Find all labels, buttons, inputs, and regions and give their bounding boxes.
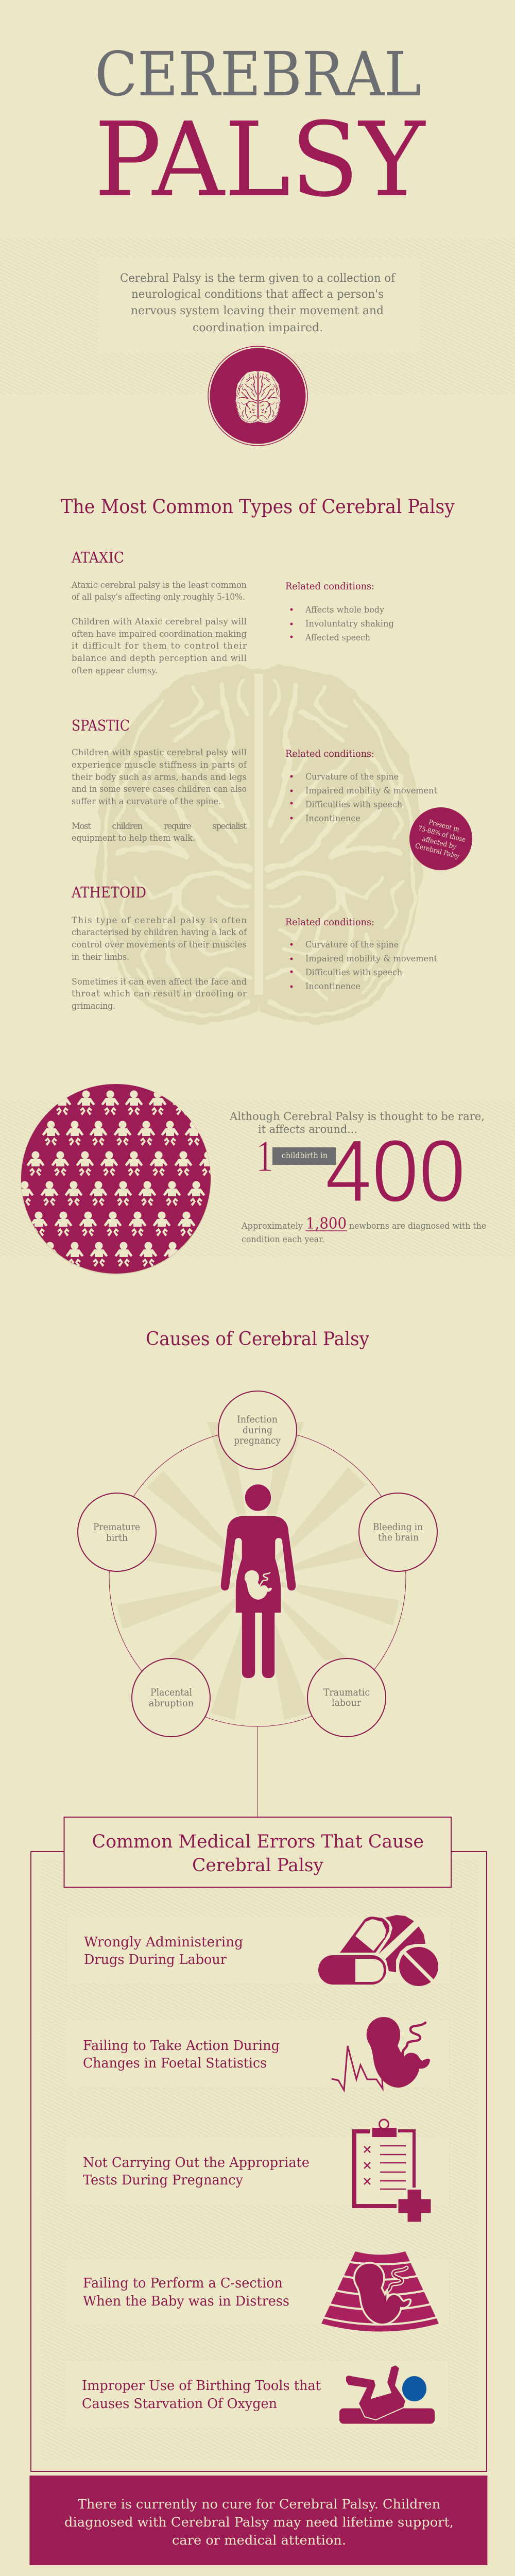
panel: ataxic: often appear clumsy. xyxy=(72,666,158,675)
icon: ultrasound xyxy=(320,2251,439,2332)
title: CEREBRAL xyxy=(95,39,421,110)
heading: medical errors xyxy=(64,1817,451,1887)
panel: spastic: suffer with a curvature of the spine. xyxy=(72,796,221,806)
cause: premature birth: birth xyxy=(106,1533,128,1544)
panel: athetoid: Curvature of the spine xyxy=(305,940,399,950)
error: appropriate tests: Tests During Pregnancy xyxy=(83,2173,243,2188)
cause: placental abruption: abruption xyxy=(149,1698,194,1709)
statistic: 1 in 400: childbirth in xyxy=(282,1151,328,1160)
cause: traumatic labour: Traumatic xyxy=(323,1687,370,1698)
heading: medical errors: Cerebral Palsy xyxy=(192,1855,323,1876)
baby circle xyxy=(15,1084,217,1275)
statistic: 1 in 400: it affects around... xyxy=(258,1123,357,1136)
heading: medical errors: Common Medical Errors That Cause xyxy=(92,1832,424,1852)
cause: bleeding: the brain xyxy=(378,1532,419,1543)
panel: ataxic: Involuntatry shaking xyxy=(305,619,394,629)
heading: causes: Causes of Cerebral Palsy xyxy=(146,1329,370,1350)
cause: premature birth xyxy=(78,1493,156,1571)
banner: no cure: diagnosed with Cerebral Palsy may need lifetime support, xyxy=(64,2515,454,2530)
banner: no cure: There is currently no cure for Cerebral Palsy. Children xyxy=(78,2497,440,2512)
panel: athetoid: Impaired mobility & movement xyxy=(305,954,437,963)
cause: infection: Infection xyxy=(237,1414,278,1425)
panel: athetoid: in their limbs. xyxy=(72,952,129,962)
statistic: 1 in 400: Although Cerebral Palsy is thought to be rare, xyxy=(229,1110,485,1123)
error: wrongly administering drugs xyxy=(67,1915,451,1987)
error: foetal statistics: Failing to Take Action During xyxy=(83,2038,280,2054)
panel: spastic: experience muscle stiffness in parts of xyxy=(72,760,248,770)
panel: ataxic: of all palsy's affecting only roughly 5-10%. xyxy=(72,592,245,602)
error: c-section: When the Baby was in Distress xyxy=(83,2294,289,2309)
panel: ataxic: Related conditions: xyxy=(285,581,374,592)
panel: spastic: SPASTIC xyxy=(72,717,130,734)
panel: spastic: their body such as arms, hands and legs xyxy=(72,772,247,782)
panel: ataxic: often have impaired coordination making xyxy=(72,629,247,639)
icon: clipboard xyxy=(354,2120,431,2222)
cause: bleeding xyxy=(359,1493,437,1571)
panel: ataxic: ATAXIC xyxy=(71,549,124,566)
panel: ataxic xyxy=(71,549,394,675)
panel: ataxic: Children with Ataxic cerebral palsy will xyxy=(72,617,247,626)
badge: 75-88%: 75-88% of those xyxy=(417,825,467,844)
badge: 75-88% xyxy=(409,807,472,871)
panel: spastic: Impaired mobility & movement xyxy=(305,786,437,795)
error: birthing tools xyxy=(65,2360,449,2428)
panel: spastic xyxy=(72,717,437,843)
error: birthing tools: Causes Starvation Of Oxygen xyxy=(82,2396,277,2412)
icon: pills xyxy=(318,1915,439,1987)
panel: athetoid: Difficulties with speech xyxy=(305,968,402,977)
cause: placental abruption xyxy=(132,1658,210,1737)
rays xyxy=(116,1422,399,1720)
icon: fetus with heartbeat xyxy=(332,2017,430,2090)
panel: spastic: and in some severe cases children can also xyxy=(72,784,247,794)
icon: brain in circle xyxy=(208,346,307,446)
cause: infection xyxy=(218,1391,297,1469)
error: appropriate tests xyxy=(65,2120,449,2222)
panel: ataxic: Affected speech xyxy=(305,633,370,642)
panel: ataxic: it difficult for them to control their xyxy=(72,641,247,651)
error: wrongly administering drugs: Wrongly Administering xyxy=(84,1935,243,1950)
diagram: causes xyxy=(78,1391,437,1817)
statistic: 1 in 400: 1 xyxy=(256,1131,273,1181)
panel: ataxic: Affects whole body xyxy=(305,605,385,615)
statistic: 1 in 400: 400 xyxy=(325,1122,466,1221)
intro text: nervous system leaving their movement and xyxy=(131,304,384,317)
icon: pregnant woman xyxy=(220,1484,296,1679)
statistic: 1 in 400: 1,800 xyxy=(306,1215,347,1233)
panel: athetoid: control over movements of their muscles xyxy=(72,940,247,950)
badge: 75-88%: Cerebral Palsy xyxy=(414,842,460,861)
panel: athetoid: throat which can result in drooling or xyxy=(72,989,247,998)
intro text xyxy=(120,272,396,334)
panel: medical errors xyxy=(31,1817,487,2471)
intro text: neurological conditions that affect a person's xyxy=(131,288,384,301)
statistic: 1 in 400: Approximately xyxy=(241,1221,303,1231)
error: wrongly administering drugs: Drugs During Labour xyxy=(84,1952,227,1968)
banner: no cure: care or medical attention. xyxy=(172,2533,346,2548)
panel: athetoid: ATHETOID xyxy=(71,884,146,901)
panel: athetoid: grimacing. xyxy=(72,1001,115,1011)
error: foetal statistics: Changes in Foetal Statistics xyxy=(83,2056,267,2071)
statistic: 1 in 400: condition each year. xyxy=(242,1234,324,1244)
intro text: coordination impaired. xyxy=(193,321,323,334)
cause: placental abruption: Placental xyxy=(150,1687,192,1698)
panel: spastic: Related conditions: xyxy=(285,748,374,759)
panel: spastic: equipment to help them walk. xyxy=(72,833,195,843)
panel: spastic: Incontinence xyxy=(305,814,360,823)
title: PALSY xyxy=(94,100,426,219)
panel: spastic: Difficulties with speech xyxy=(305,800,402,809)
panel: spastic: Curvature of the spine xyxy=(305,772,399,782)
statistic: 1 in 400 xyxy=(229,1110,486,1244)
cause: premature birth: Premature xyxy=(93,1522,140,1533)
error: c-section: Failing to Perform a C-section xyxy=(83,2276,283,2291)
panel: athetoid: Sometimes it can even affect the face and xyxy=(72,977,247,987)
error: appropriate tests: Not Carrying Out the Appropriate xyxy=(83,2155,310,2171)
panel: spastic: Most children require specialist xyxy=(72,821,247,831)
title xyxy=(94,39,426,219)
intro text: Cerebral Palsy is the term given to a collection of xyxy=(120,272,396,285)
panel: spastic: Children with spastic cerebral palsy will xyxy=(72,748,247,757)
badge: 75-88%: Present in xyxy=(427,819,460,834)
error: c-section xyxy=(65,2251,449,2332)
cause: traumatic labour xyxy=(307,1658,386,1737)
panel: athetoid: Related conditions: xyxy=(285,917,374,928)
panel: ataxic: Ataxic cerebral palsy is the least common xyxy=(71,580,247,590)
panel: ataxic: balance and depth perception and will xyxy=(72,653,247,663)
banner: no cure xyxy=(29,2476,487,2565)
brain watermark xyxy=(94,664,423,1024)
cause: bleeding: Bleeding in xyxy=(373,1522,423,1533)
error: birthing tools: Improper Use of Birthing Tools that xyxy=(82,2378,321,2394)
cause: traumatic labour: labour xyxy=(332,1698,361,1708)
cause: infection: pregnancy xyxy=(234,1435,281,1446)
cause: infection: during xyxy=(243,1425,272,1436)
heading: types: The Most Common Types of Cerebral Palsy xyxy=(61,496,455,518)
statistic: 1 in 400: newborns are diagnosed with the xyxy=(349,1221,486,1231)
panel: athetoid: Incontinence xyxy=(305,981,360,991)
panel: athetoid xyxy=(71,884,437,1011)
icon: baby on mat xyxy=(339,2365,435,2424)
panel: athetoid: This type of cerebral palsy is often xyxy=(72,916,247,925)
badge: 75-88%: affected by xyxy=(421,835,457,851)
error: foetal statistics xyxy=(65,2017,449,2090)
panel: athetoid: characterised by children having a lack of xyxy=(72,927,248,937)
